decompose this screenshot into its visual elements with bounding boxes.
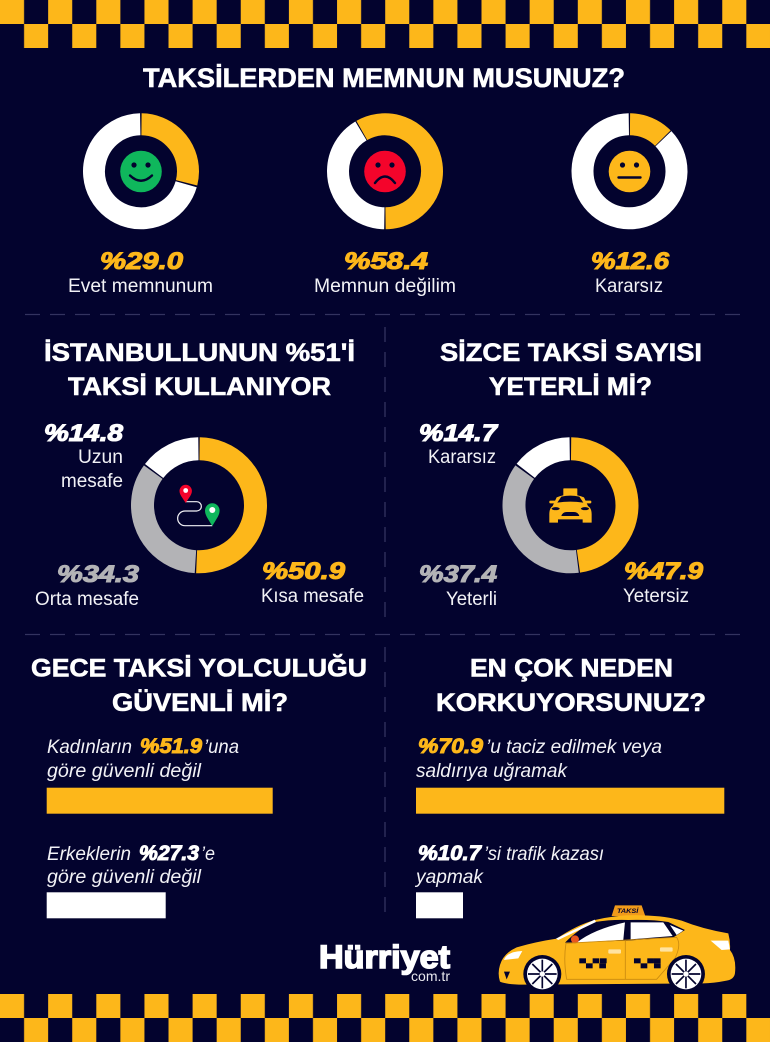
panel: satisfied	[68, 113, 213, 297]
label: short: Kısa mesafe	[261, 586, 364, 607]
heading	[31, 654, 367, 717]
icon: neutral face	[609, 151, 650, 192]
value: long: %14.8	[44, 420, 124, 447]
text: women: ’una	[204, 737, 239, 758]
text: men: %27.3	[139, 842, 199, 865]
wheel: rear	[667, 955, 705, 993]
heading	[44, 339, 355, 401]
donut: enough	[491, 426, 650, 585]
value: undecided: %14.7	[419, 420, 499, 447]
heading: EN ÇOK NEDEN	[470, 654, 673, 682]
bar: accident	[416, 892, 463, 918]
text: women	[47, 735, 239, 782]
heading: GECE TAKSİ YOLCULUĞU	[31, 654, 367, 682]
donut: 29.0 percent	[83, 113, 199, 229]
value: medium: %34.3	[57, 561, 140, 588]
value: enough: %37.4	[419, 561, 497, 588]
label: long: Uzun	[78, 447, 123, 468]
panel: not satisfied	[314, 107, 456, 297]
value: %12.6	[591, 248, 670, 275]
panel: enough taxis	[419, 339, 704, 610]
label: long: mesafe	[61, 471, 123, 492]
icon: happy face	[120, 151, 162, 192]
heading	[440, 339, 702, 401]
text: men: Erkeklerin	[47, 844, 131, 865]
roof sign	[612, 905, 645, 916]
text: women: Kadınların	[47, 737, 132, 758]
panel: undecided	[563, 105, 696, 297]
bottom checker band	[0, 994, 770, 1042]
value: not enough: %47.9	[624, 558, 704, 585]
heading: TAKSİ KULLANIYOR	[68, 373, 331, 401]
logo: com.tr	[411, 968, 450, 984]
value: %58.4	[344, 248, 428, 275]
label: Kararsız	[595, 276, 663, 297]
illustration: taxi side view	[499, 905, 735, 993]
heading: KORKUYORSUNUZ?	[436, 689, 706, 717]
wheel: front	[523, 955, 561, 993]
heading: GÜVENLİ Mİ?	[112, 688, 288, 717]
label: long	[61, 447, 123, 492]
label: undecided: Kararsız	[428, 447, 496, 468]
text: accident: ’si trafik kazası	[484, 844, 604, 865]
label: enough: Yeterli	[446, 589, 497, 610]
text: men	[47, 842, 215, 888]
text: harassment	[416, 735, 662, 782]
heading: İSTANBULLUNUN %51'İ	[44, 339, 355, 367]
text: men: ’e	[201, 844, 215, 865]
donut: 58.4 percent	[321, 107, 449, 235]
label: medium: Orta mesafe	[35, 589, 139, 610]
text: accident: yapmak	[414, 867, 485, 888]
bar: men	[47, 892, 166, 918]
heading: YETERLİ Mİ?	[489, 373, 652, 401]
bar: women	[47, 788, 273, 814]
label: not enough: Yetersiz	[623, 586, 689, 607]
label: Evet memnunum	[68, 276, 213, 297]
bar: harassment	[416, 788, 724, 814]
logo: Hürriyet	[319, 939, 450, 975]
text: harassment: %70.9	[418, 735, 483, 758]
icon: route	[178, 485, 220, 526]
text: women: %51.9	[140, 735, 202, 758]
panel: night ride safety	[31, 654, 367, 918]
donut: 12.6 percent	[563, 105, 696, 238]
value: short: %50.9	[262, 558, 346, 585]
text: women: göre güvenli değil	[47, 761, 202, 782]
donut: distance	[120, 426, 278, 585]
title: TAKSİLERDEN MEMNUN MUSUNUZ?	[143, 63, 625, 93]
heading: SİZCE TAKSİ SAYISI	[440, 339, 702, 367]
text: harassment: saldırıya uğramak	[416, 761, 568, 782]
text: accident: %10.7	[418, 842, 482, 865]
text: men: göre güvenli değil	[47, 867, 202, 888]
label: Memnun değilim	[314, 276, 456, 297]
icon: taxi front	[549, 488, 592, 523]
heading	[436, 654, 706, 717]
panel: istanbul taxi use	[35, 339, 364, 610]
icon: sad face	[364, 151, 406, 192]
top checker band	[0, 0, 770, 48]
roof sign: TAKSİ	[617, 906, 640, 915]
text: harassment: ’u taciz edilmek veya	[486, 737, 662, 758]
value: %29.0	[100, 248, 184, 275]
text: accident	[414, 842, 604, 888]
panel: biggest fear	[414, 654, 724, 918]
